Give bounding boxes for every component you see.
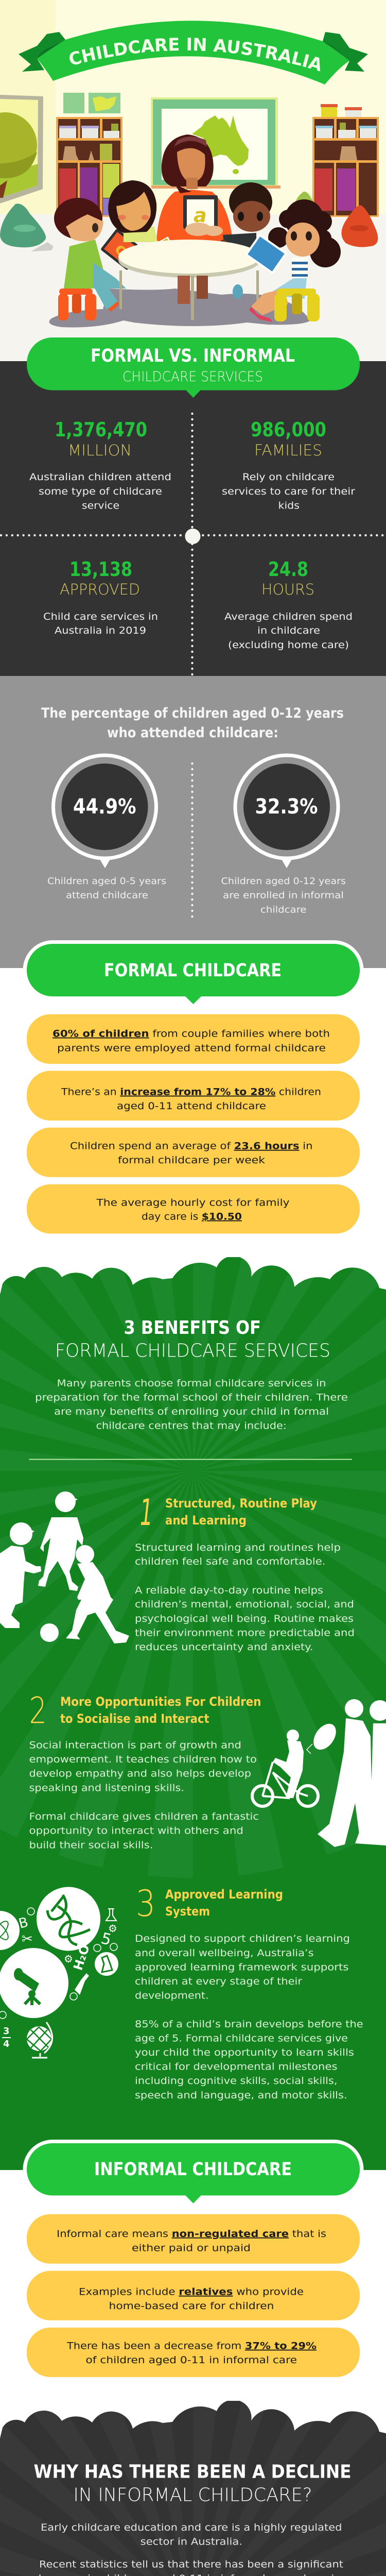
divider dots [1,414,386,675]
benefit 1 text: psychological well being. Routine makes [135,1613,354,1624]
benefit 3 text: speech and language, and motor skills. [135,2090,347,2101]
stat: 13,138 approved: Australia in 2019 [55,625,146,636]
stat: 986,000 families: services to care for their [222,486,355,497]
benefit 1 text: children feel safe and comfortable. [135,1556,325,1567]
icon: science and learning symbols: 3 [3,2026,10,2037]
boy right [219,182,272,253]
stat: 1,376,470 million [29,418,171,511]
fact pill: 37% to 29%: There has been a decrease from 37% to 29% [66,2340,317,2351]
circle stat: 32.3%: Children aged 0-12 years [221,876,346,887]
panel: formal vs informal stats [0,337,386,676]
benefit 1 text: their environment more predictable and [135,1627,355,1638]
circle stat: 44.9%: attend childcare [66,890,148,901]
heading [34,2462,351,2506]
benefit 1 text: children’s mental, emotional, social, and [135,1599,354,1610]
circle stat: 32.3%: are enrolled in informal [223,890,344,901]
bean bags [0,192,378,251]
fact pill: increase from 17% to 28%: There’s an increase from 17% to 28% children [61,1086,321,1097]
circle stat: 32.3%: 32.3% [255,795,318,819]
stat: 1,376,470 million: 1,376,470 [55,418,147,441]
benefit 1 text: Structured, Routine Play [165,1496,317,1511]
benefit 3 text: including cognitive skills, social skills, [135,2075,338,2087]
benefit 2 text: develop empathy and also helps develop [29,1768,251,1780]
benefit 3 text: your child the opportunity to learn skills [135,2047,354,2058]
icon: family with child on bike and balloon [252,1699,386,1847]
fact pill: increase from 17% to 28%: aged 0-11 attend childcare [117,1100,266,1112]
intro text [34,2522,348,2576]
stat: 986,000 families [222,418,355,511]
benefit 3 text: approved learning framework supports [135,1962,349,1973]
teacher: a [194,204,207,227]
benefit 1 text: 1 [140,1492,153,1534]
stat: 986,000 families: 986,000 [251,418,326,441]
heading: IN INFORMAL CHILDCARE? [73,2484,312,2506]
stat: 24.8 hours [224,558,353,651]
stat: 986,000 families: Rely on childcare [242,471,335,483]
fact pill: increase from 17% to 28% [27,1071,360,1121]
heading: The percentage of children aged 0-12 years [41,705,344,721]
stat: 24.8 hours: Average children spend [224,611,353,622]
icon: science and learning symbols: ⚙ [108,1922,117,1935]
benefit 2 text: speaking and listening skills. [29,1783,184,1794]
fact pill: 60% of children: 60% of children from couple families where both [52,1028,330,1040]
girl right [233,199,341,322]
intro text: preparation for the formal school of their children. There [35,1392,348,1403]
intro text: childcare centres that may include: [96,1420,287,1432]
banner: Childcare in Australia [19,21,368,84]
circle stat: 32.3%: childcare [260,905,307,915]
benefit 2 text [29,1690,261,1851]
wall posters [63,93,120,113]
title: CHILDCARE IN AUSTRALIA [69,38,320,71]
intro text [35,1378,348,1432]
benefit 2 text: to Socialise and Interact [60,1711,209,1726]
stat: 24.8 hours: (excluding home care) [228,639,349,651]
benefit 3 text: 85% of a child’s brain develops before the [135,2019,363,2030]
heading [41,705,344,741]
benefit 2 text: opportunity to interact with others and [29,1825,243,1837]
intro text: Early childcare education and care is a highly regulated [41,2522,342,2533]
benefit 3 text: 3 [136,1883,155,1925]
panel: percentage of children [0,676,386,968]
intro text: Many parents choose formal childcare services in [57,1378,326,1389]
benefit 3 text: children at every stage of their [135,1976,302,1987]
section header: formal vs informal [27,337,360,398]
icon: science and learning symbols [0,1887,118,2058]
intro text: Recent statistics tell us that there has been a significant [39,2558,343,2570]
stools and legs [58,283,320,321]
benefit 3 text: development. [135,1990,209,2002]
benefit 2 text: 2 [29,1690,47,1732]
benefit 2 text: Formal childcare gives children a fantastic [29,1811,259,1822]
heading [55,1317,330,1362]
stat: 24.8 hours: 24.8 [268,558,308,581]
fact pill: relatives: home-based care for children [109,2300,274,2312]
icon: science and learning symbols: ⚙ [64,1953,73,1965]
icon: science and learning symbols: 5 [99,1929,113,1950]
benefit 3 text [135,1883,363,2101]
benefit 1 text [135,1492,355,1653]
fact pill: $10.50 [27,1184,360,1233]
icon: science and learning symbols: H₂O [71,1943,93,1972]
fact pill: 37% to 29%: of children aged 0-11 in informal care [85,2354,297,2366]
window with tree [0,95,43,204]
stat: 986,000 families: kids [278,500,300,511]
table [118,240,260,320]
stat: 13,138 approved [43,558,158,636]
panel: 3 benefits of formal childcare [0,1257,386,2172]
benefit 2 text: More Opportunities For Children [60,1694,261,1709]
icon: science and learning symbols: ✂ [22,1931,33,1947]
whiteboard with map of Australia [151,97,280,189]
stat: 1,376,470 million: MILLION [68,442,132,459]
stat: 24.8 hours: in childcare [257,625,320,636]
heading: WHY HAS THERE BEEN A DECLINE [34,2462,351,2483]
circle stat: 32.3% [221,755,346,915]
benefit 3 text: and overall wellbeing, Australia’s [135,1947,314,1959]
fact pill: non-regulated care [27,2214,360,2264]
section header: formal vs informal: CHILDCARE SERVICES [122,369,263,385]
section header: informal childcare [23,2140,363,2204]
stat: 986,000 families: FAMILIES [254,442,322,459]
circle stat: 44.9%: Children aged 0-5 years [47,876,166,887]
stat: 1,376,470 million: some type of childcare [39,486,162,497]
benefit 1 text: A reliable day-to-day routine helps [135,1585,323,1596]
section header: formal childcare: FORMAL CHILDCARE [104,960,282,981]
fact pill: non-regulated care: Informal care means non-regulated care that is [57,2228,326,2240]
benefit 3 text: Approved Learning [165,1887,283,1902]
benefit 2 text: build their social skills. [29,1839,153,1851]
fact pill: $10.50: The average hourly cost for family [96,1197,289,1209]
shelf left [56,117,122,217]
section header: formal vs informal: FORMAL VS. INFORMAL [91,346,295,366]
fact pill: $10.50: day care is $10.50 [142,1211,242,1223]
hero illustration: classroom [0,0,386,361]
stat: 1,376,470 million: Australian children attend [29,471,171,483]
heading: who attended childcare: [107,725,278,741]
fact pill: 23.6 hours [27,1128,360,1177]
panel: why has there been a decline [0,2401,386,2576]
stat: 13,138 approved: 13,138 [69,558,132,581]
icon: children playing football [0,1492,129,1643]
benefit 1 text: reduces uncertainty and anxiety. [135,1641,313,1653]
circle stat: 44.9% [47,755,166,901]
benefit 1 text: and Learning [165,1513,247,1528]
heading: FORMAL CHILDCARE SERVICES [55,1341,330,1362]
heading: 3 BENEFITS OF [124,1317,261,1338]
icon: science and learning symbols: 4 [3,2039,10,2049]
benefit 3 text: critical for developmental milestones [135,2061,338,2073]
benefit 3 text: age of 5. Formal childcare services give [135,2033,348,2044]
fact pill: 23.6 hours: formal childcare per week [118,1155,265,1166]
benefit 3 text: System [165,1904,210,1919]
fact pill: non-regulated care: either paid or unpaid [132,2242,251,2253]
benefit 3 text: Designed to support children’s learning [135,1933,350,1944]
boy left [54,198,176,289]
circle stat: 44.9%: 44.9% [73,795,136,819]
stat: 13,138 approved: APPROVED [60,581,140,598]
fact pill: 37% to 29% [27,2328,360,2377]
section header: formal childcare [23,940,363,1007]
girl left [108,180,157,242]
intro text: sector in Australia. [141,2536,242,2547]
benefit 2 text: empowerment. It teaches children how to [29,1754,257,1765]
section header: informal childcare: INFORMAL CHILDCARE [94,2159,292,2180]
benefit 1 text: Structured learning and routines help [135,1542,341,1553]
teacher [156,134,233,241]
stat: 13,138 approved: Child care services in [43,611,158,622]
intro text: are many benefits of enrolling your child in formal [54,1406,329,1417]
fact pill: 60% of children: parents were employed attend formal childcare [57,1043,326,1054]
floor shadow [49,289,310,327]
benefit 2 text: Social interaction is part of growth and [29,1740,241,1751]
boy left: c [111,239,131,260]
stat: 1,376,470 million: service [82,500,119,511]
fact pill: 23.6 hours: Children spend an average of 23.6 hours in [70,1141,313,1152]
stat: 24.8 hours: HOURS [261,581,314,598]
fact pill: relatives [27,2271,360,2320]
shelf right [312,104,379,217]
fact pill: 60% of children [27,1014,360,1064]
fact pill: relatives: Examples include relatives who provide [79,2286,304,2298]
icon: science and learning symbols: B [17,1914,30,1932]
